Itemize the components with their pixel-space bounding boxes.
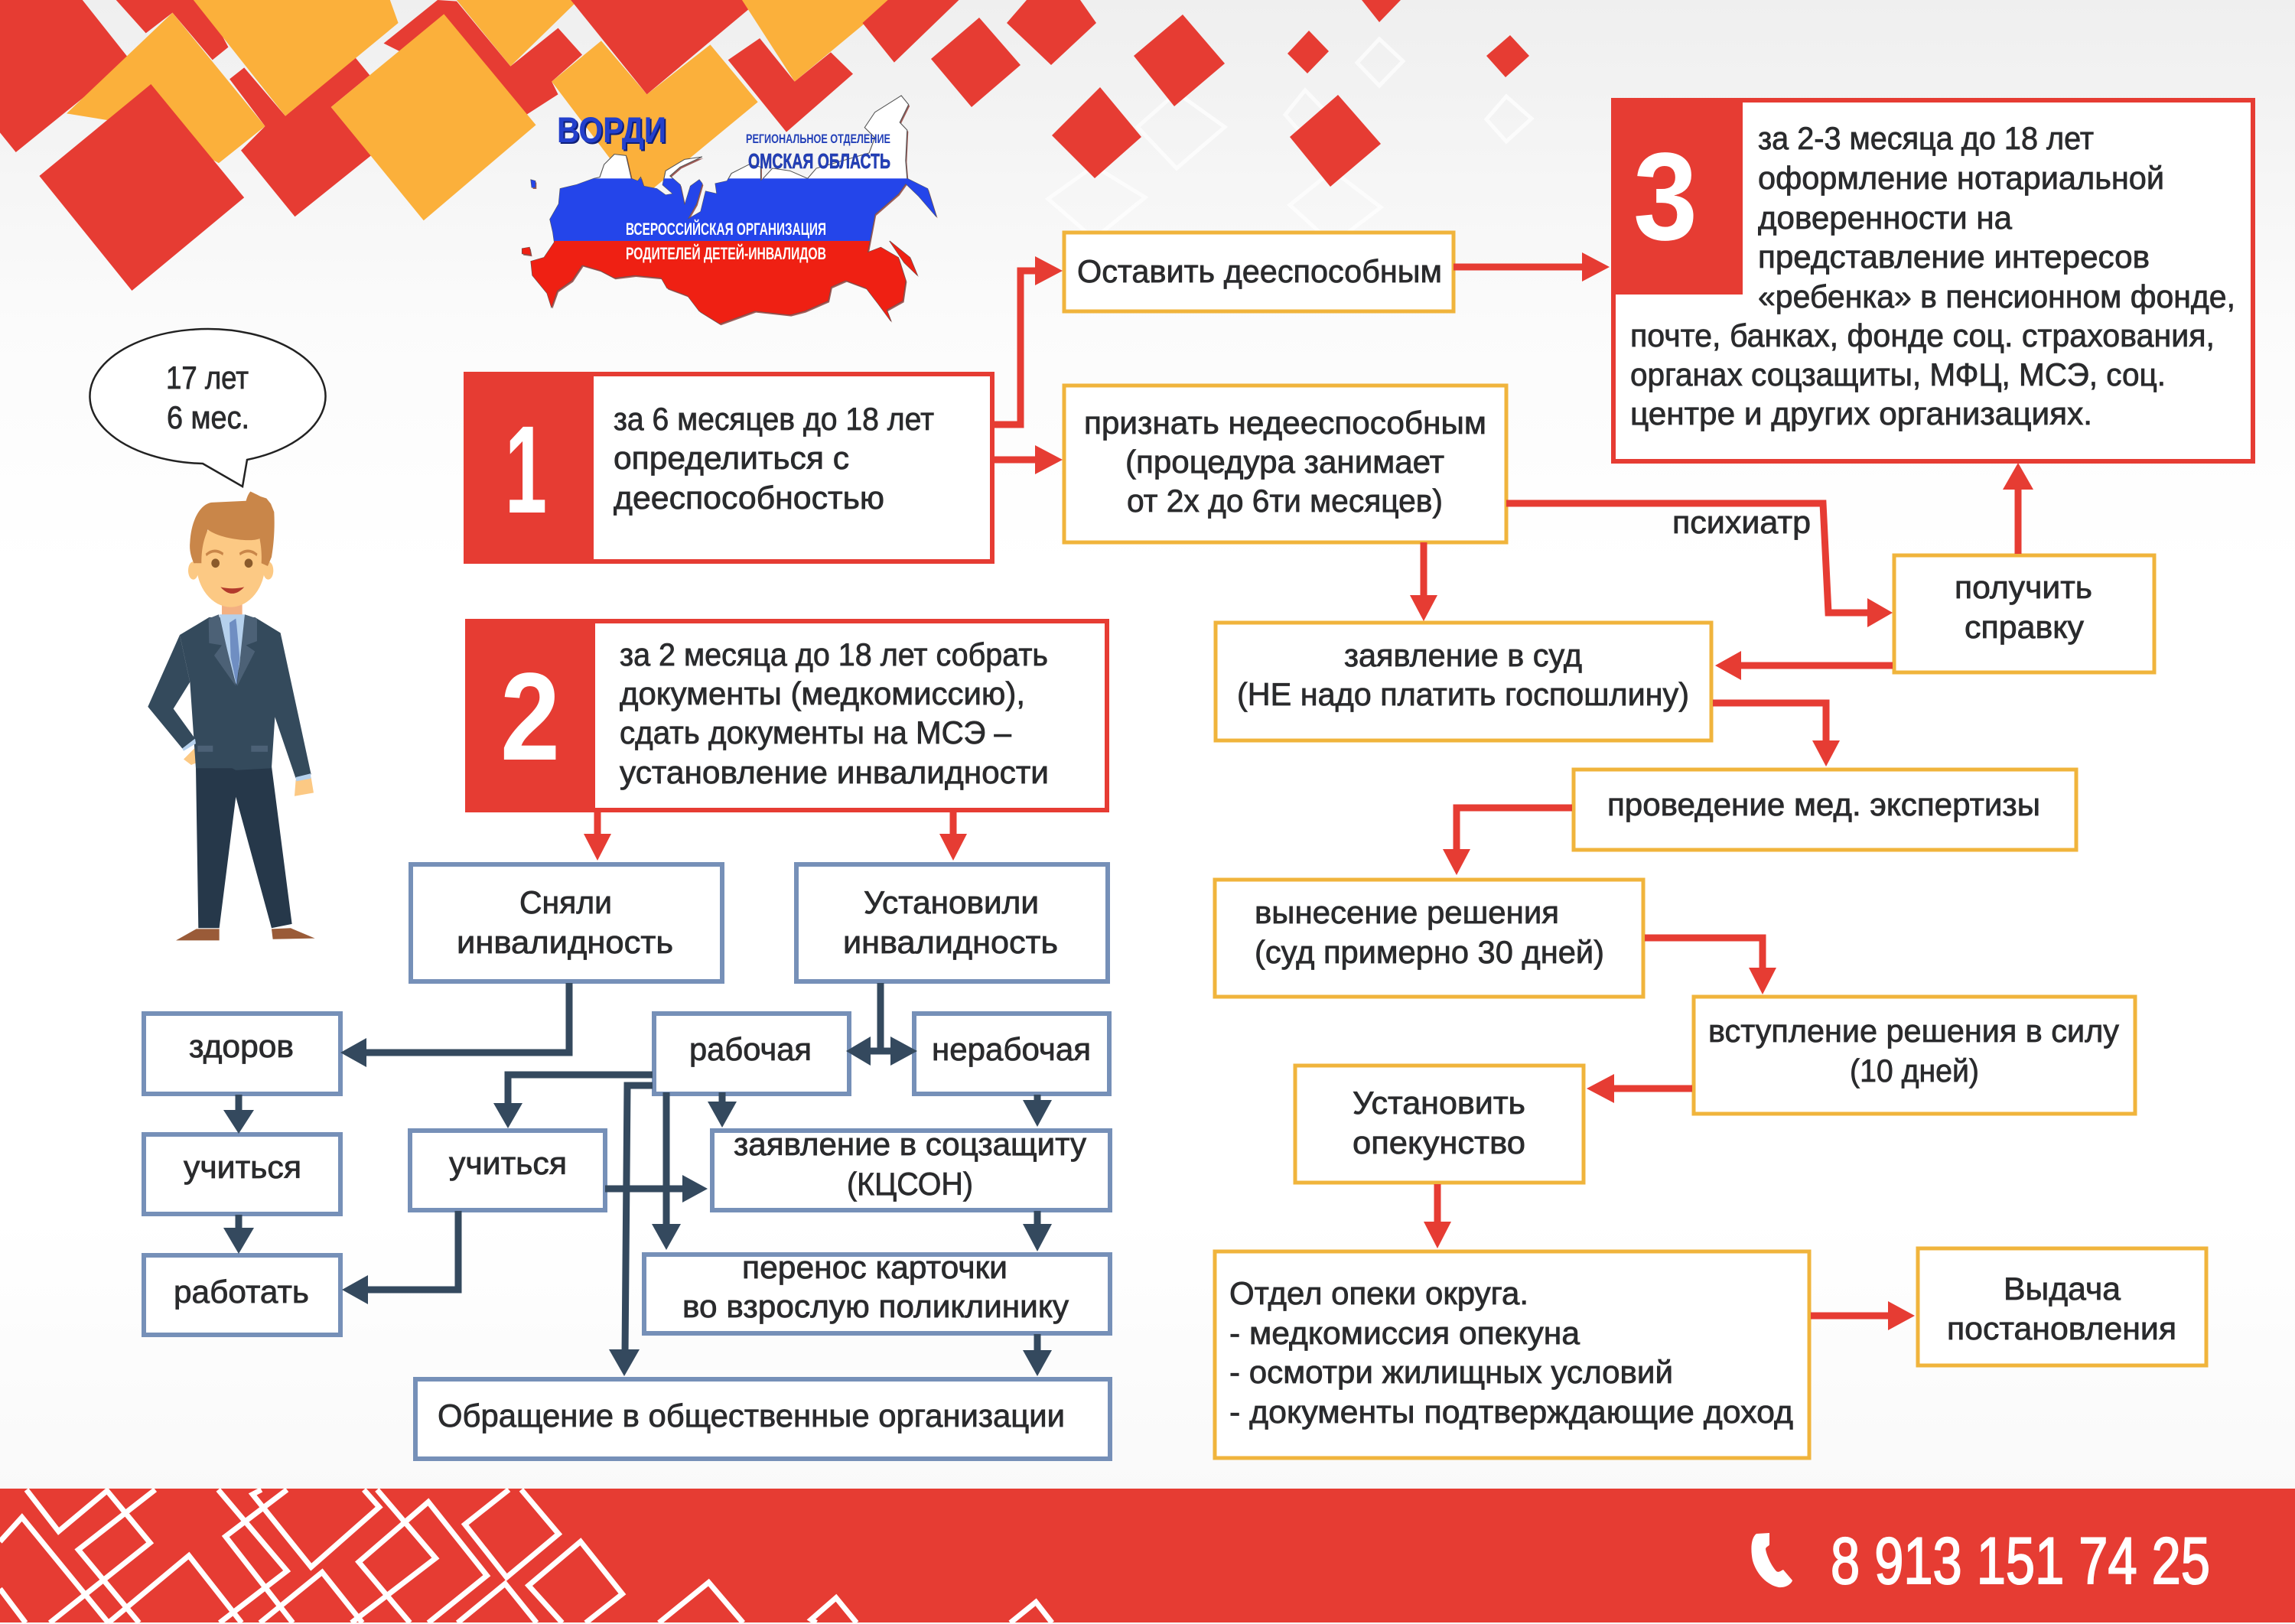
box: рабочая: рабочая xyxy=(689,1031,812,1067)
box: Отдел опеки округа xyxy=(1215,1251,1809,1458)
box: здоров xyxy=(144,1014,340,1094)
box: нерабочая xyxy=(914,1014,1109,1094)
box: Оставить дееспособным: Оставить дееспособным xyxy=(1077,253,1442,289)
step 3 box: оформление нотариальной xyxy=(1758,160,2164,196)
box: Отдел опеки округа: - осмотри жилищных условий xyxy=(1229,1354,1673,1390)
box: заявление в суд: заявление в суд xyxy=(1344,637,1582,673)
box: получить справку xyxy=(1894,555,2154,672)
step 3 box: доверенности на xyxy=(1758,200,2013,236)
step 1 box: дееспособностью xyxy=(614,480,884,516)
box: Отдел опеки округа: Отдел опеки округа. xyxy=(1229,1275,1528,1311)
box: заявление в соцзащиту: заявление в соцзащиту xyxy=(734,1126,1086,1162)
box: Выдача постановления: Выдача xyxy=(2004,1271,2121,1307)
step 2 box: документы (медкомиссию), xyxy=(620,675,1025,711)
step 2 box: за 2 месяца до 18 лет собрать xyxy=(620,636,1048,672)
box: вступление решения в силу: вступление решения в силу xyxy=(1708,1013,2119,1049)
box: Установили инвалидность xyxy=(796,864,1108,981)
box: работать: работать xyxy=(174,1274,309,1310)
box: рабочая xyxy=(654,1014,849,1094)
icon: phone xyxy=(1751,1533,1792,1587)
box: Сняли инвалидность xyxy=(411,864,722,981)
box: Выдача постановления: постановления xyxy=(1947,1310,2176,1346)
box: вступление решения в силу: (10 дней) xyxy=(1850,1053,1979,1089)
logo: ВОРДИ map of Russia: ВОРДИ xyxy=(557,109,666,150)
logo: ВОРДИ map of Russia: РОДИТЕЛЕЙ ДЕТЕЙ-ИНВАЛИДОВ xyxy=(626,244,826,263)
speech bubble xyxy=(90,329,325,487)
box: Установили инвалидность: Установили xyxy=(864,884,1039,920)
logo: ВОРДИ map of Russia: ВСЕРОССИЙСКАЯ ОРГАНИЗАЦИЯ xyxy=(626,220,826,239)
box: проведение мед. экспертизы: проведение мед. экспертизы xyxy=(1607,786,2040,822)
box: учиться (middle) xyxy=(410,1131,605,1210)
speech bubble: 17 лет xyxy=(166,360,249,395)
speech bubble: 6 мес. xyxy=(167,399,249,435)
box: вынесение решения xyxy=(1215,880,1643,997)
box: перенос карточки xyxy=(644,1249,1110,1333)
box: вынесение решения: вынесение решения xyxy=(1255,894,1559,930)
step 3 box: 3 xyxy=(1633,126,1698,266)
red arrows: decision flow xyxy=(584,252,2033,1330)
logo: ВОРДИ map of Russia: ВОРДИ xyxy=(558,111,668,151)
step 3 box xyxy=(1611,99,2253,461)
box: Обращение в общественные организации xyxy=(415,1379,1110,1459)
footer band xyxy=(0,1489,2295,1622)
box: учиться (left): учиться xyxy=(184,1149,301,1185)
step 1 box: за 6 месяцев до 18 лет xyxy=(614,401,934,437)
box: здоров: здоров xyxy=(189,1028,294,1064)
box: признать недееспособным: от 2х до 6ти месяцев) xyxy=(1127,483,1443,519)
box: признать недееспособным: (процедура занимает xyxy=(1125,444,1444,480)
top decoration: overlapping red and orange diamonds xyxy=(0,0,959,291)
box: заявление в соцзащиту: (КЦСОН) xyxy=(847,1166,973,1202)
box: Установили инвалидность: инвалидность xyxy=(843,924,1058,960)
step 2 box: сдать документы на МСЭ – xyxy=(620,714,1012,750)
step 3 box: представление интересов xyxy=(1758,239,2150,275)
step 1 box: 1 xyxy=(505,399,547,539)
box: Установить опекунство: Установить xyxy=(1353,1085,1525,1121)
box: признать недееспособным: признать недееспособным xyxy=(1084,405,1486,441)
step 1 box: определиться с xyxy=(614,440,849,476)
box: учиться (left) xyxy=(144,1134,340,1214)
box: получить справку: справку xyxy=(1965,609,2084,645)
box: работать xyxy=(144,1255,340,1335)
box: Обращение в общественные организации: Обращение в общественные организации xyxy=(438,1398,1065,1434)
step 3 box: органах соцзащиты, МФЦ, МСЭ, соц. xyxy=(1630,356,2166,392)
scattered red diamonds top right xyxy=(931,0,1529,187)
box: признать недееспособным xyxy=(1064,386,1506,542)
character: young man in suit xyxy=(148,491,315,940)
phone number: 8 913 151 74 25 xyxy=(1831,1525,2210,1598)
box: Отдел опеки округа: - медкомиссия опекуна xyxy=(1229,1315,1580,1351)
box: Сняли инвалидность: Сняли xyxy=(519,884,612,920)
box: нерабочая: нерабочая xyxy=(932,1031,1091,1067)
step 3 box: «ребенка» в пенсионном фонде, xyxy=(1758,278,2235,314)
logo: ВОРДИ map of Russia: РЕГИОНАЛЬНОЕ ОТДЕЛЕНИЕ xyxy=(746,132,890,146)
logo: ВОРДИ map of Russia xyxy=(522,95,938,326)
box: заявление в суд xyxy=(1216,623,1711,740)
dark arrows: disability flow xyxy=(223,983,1052,1376)
box: учиться (middle): учиться xyxy=(449,1145,567,1181)
step 2 box xyxy=(465,619,1107,811)
box: перенос карточки: перенос карточки xyxy=(742,1249,1008,1285)
box: получить справку: получить xyxy=(1955,569,2092,605)
step 1 box xyxy=(464,372,992,564)
box: заявление в соцзащиту xyxy=(712,1126,1110,1210)
box: Сняли инвалидность: инвалидность xyxy=(457,924,673,960)
box: вступление решения в силу xyxy=(1694,997,2135,1114)
box: Выдача постановления xyxy=(1918,1248,2206,1365)
box: Установить опекунство xyxy=(1295,1066,1584,1183)
box: проведение мед. экспертизы xyxy=(1574,770,2076,850)
label: психиатр: психиатр xyxy=(1672,504,1811,540)
box: Оставить дееспособным xyxy=(1064,233,1454,311)
step 2 box: 2 xyxy=(500,646,560,786)
box: перенос карточки: во взрослую поликлинику xyxy=(682,1288,1069,1324)
step 3 box: почте, банках, фонде соц. страхования, xyxy=(1630,317,2215,353)
step 3 box: за 2-3 месяца до 18 лет xyxy=(1758,120,2094,156)
box: Отдел опеки округа: - документы подтверждающие доход xyxy=(1229,1394,1793,1430)
box: заявление в суд: (НЕ надо платить госпошлину) xyxy=(1237,676,1689,712)
step 3 box: центре и других организациях. xyxy=(1630,395,2092,431)
box: Установить опекунство: опекунство xyxy=(1353,1124,1525,1160)
box: вынесение решения: (суд примерно 30 дней) xyxy=(1255,934,1604,970)
step 2 box: установление инвалидности xyxy=(620,754,1049,790)
logo: ВОРДИ map of Russia: ОМСКАЯ ОБЛАСТЬ xyxy=(748,149,890,173)
